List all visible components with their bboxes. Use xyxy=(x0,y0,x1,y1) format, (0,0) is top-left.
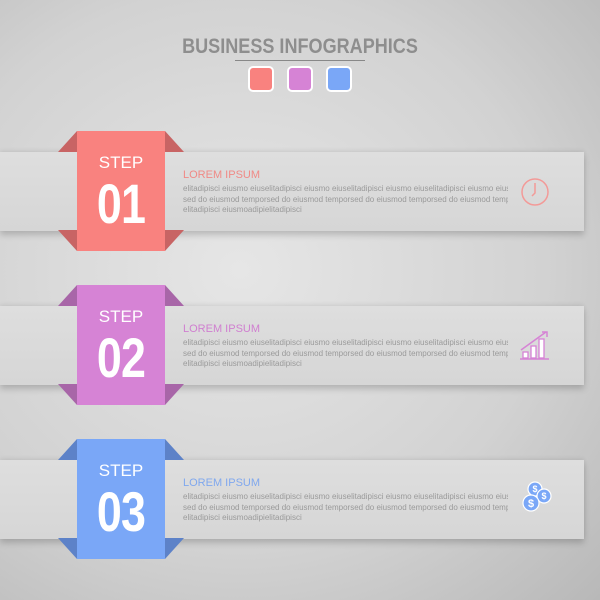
text: step 02 xyxy=(183,323,508,368)
card: step 03 xyxy=(77,439,165,559)
card: step 01: 01 xyxy=(97,172,145,235)
legend swatches xyxy=(248,66,352,92)
icon: coins: $ xyxy=(528,498,534,510)
card: step 01: STEP xyxy=(99,153,143,172)
text: step 01: elitadipisci eiusmo eiuselitadipisci eiusmo eiuselitadipisci eiusmo eiuselitadipisci eiusmo eius xyxy=(183,184,508,193)
panel: step 01 xyxy=(0,131,586,251)
card: step 02: STEP xyxy=(99,307,143,326)
text: step 02: sed do eiusmod temporsed do eiusmod temporsed do eiusmod temporsed do eiusmod tempor xyxy=(183,348,508,358)
text: step 02: LOREM IPSUM xyxy=(183,323,260,335)
card: step 02: 02 xyxy=(97,326,145,389)
text: step 01: sed do eiusmod temporsed do eiusmod temporsed do eiusmod temporsed do eiusmod tempor xyxy=(183,194,508,204)
text: step 03: LOREM IPSUM xyxy=(183,477,260,489)
text: step 03: elitadipisci eiusmo eiuselitadipisci eiusmo eiuselitadipisci eiusmo eiuselitadipisci eiusmo eius xyxy=(183,492,508,501)
icon: coins xyxy=(522,482,552,512)
title underline xyxy=(235,60,365,61)
panel: step 03 xyxy=(0,439,586,559)
text: step 01 xyxy=(183,169,508,214)
text: step 03: sed do eiusmod temporsed do eiusmod temporsed do eiusmod temporsed do eiusmod tempor xyxy=(183,502,508,512)
icon: growth chart xyxy=(520,331,549,360)
text: step 03: elitadipisci eiusmoadipielitadipisci xyxy=(183,513,302,522)
text: step 01: LOREM IPSUM xyxy=(183,169,260,181)
text: step 02: elitadipisci eiusmo eiuselitadipisci eiusmo eiuselitadipisci eiusmo eiuselitadipisci eiusmo eius xyxy=(183,338,508,347)
card: step 02 xyxy=(77,285,165,405)
panel: step 02 xyxy=(0,285,586,405)
card: step 01 xyxy=(77,131,165,251)
text: step 03 xyxy=(183,477,508,522)
icon: coins: $ xyxy=(541,491,547,501)
card: step 03: 03 xyxy=(97,480,145,543)
title: BUSINESS INFOGRAPHICS xyxy=(182,35,418,58)
text: step 02: elitadipisci eiusmoadipielitadipisci xyxy=(183,359,302,368)
text: step 01: elitadipisci eiusmoadipielitadipisci xyxy=(183,205,302,214)
icon: coins: $ xyxy=(532,484,538,494)
icon: clock xyxy=(521,178,549,206)
card: step 03: STEP xyxy=(99,461,143,480)
